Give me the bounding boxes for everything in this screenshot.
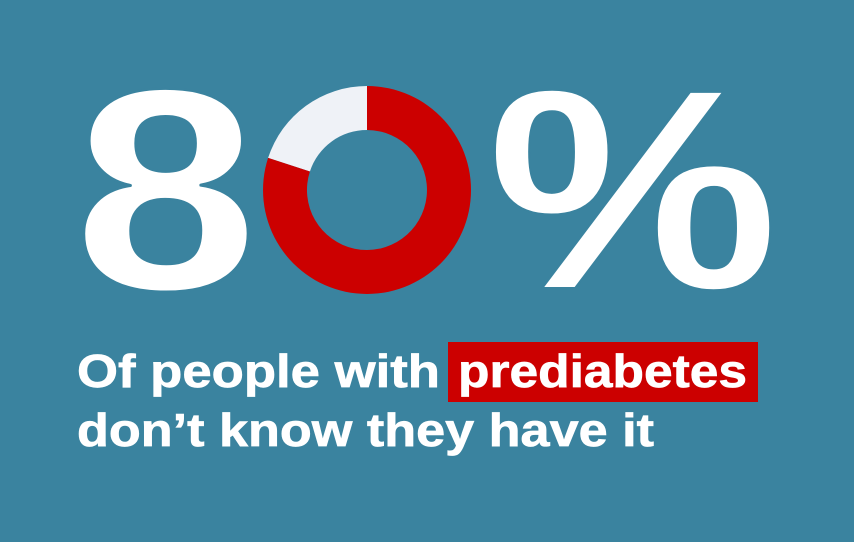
highlight: prediabetes [448,342,758,402]
highlight box [448,342,758,402]
donut segment: remaining 20 percent [268,86,367,172]
donut chart: 80 percent as the zero [263,86,471,294]
big number: 8: 8 [73,30,258,350]
caption line two: don’t know they have it [77,404,654,456]
big percent sign: % [487,31,779,349]
highlighted word: prediabetes [458,345,747,397]
donut segment: 80 percent [263,86,471,294]
caption line one: Of people with [77,345,440,397]
